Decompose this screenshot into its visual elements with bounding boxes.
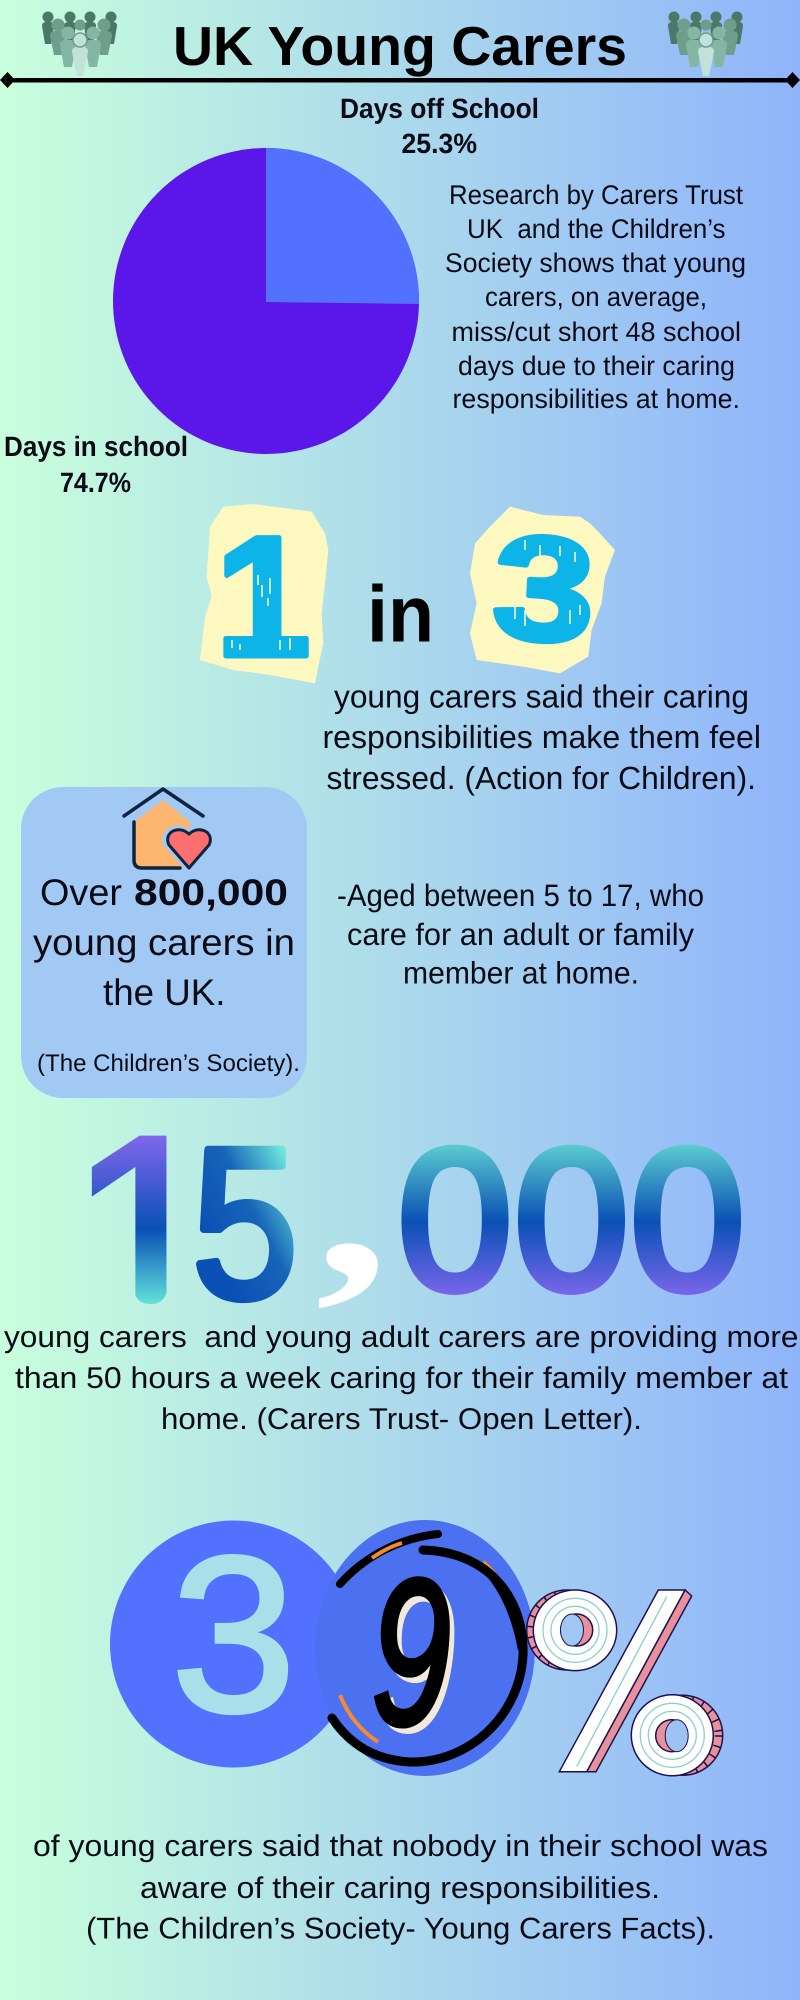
icon: group of people right (668, 12, 743, 76)
text block: aged between: -Aged between 5 to 17, who (337, 878, 704, 913)
text: over 800,000: the UK. (103, 972, 226, 1013)
text: in: in (367, 570, 434, 658)
text block: nobody aware: of young carers said that nobody in their school was (33, 1830, 768, 1863)
text block: 50 hours: young carers and young adult carers are providing more (4, 1321, 798, 1354)
top ring of percent (527, 1590, 617, 1671)
label: days off school (340, 93, 539, 159)
title divider with diamonds (0, 72, 800, 88)
label: days in school: 74.7% (60, 467, 131, 498)
slash of percent: % (528, 1543, 726, 1828)
text block: aged between (337, 878, 704, 990)
text block: nobody aware: (The Children’s Society- Young Carers Facts). (86, 1912, 715, 1946)
text block: 50 hours: than 50 hours a week caring for their family member at (15, 1362, 789, 1395)
text: over 800,000 (33, 872, 295, 1013)
text: over 800,000: Over (40, 872, 122, 913)
big number: 15,000: 1 (68, 1080, 224, 1380)
text block: stressed (322, 678, 761, 796)
big number: 15,000: , (315, 1083, 389, 1322)
pie chart (113, 148, 419, 454)
circle behind 3 (110, 1520, 357, 1768)
text block: aged between: member at home. (403, 956, 639, 990)
icon: house with heart (124, 789, 216, 874)
digit 3: 3 (171, 1511, 296, 1759)
text block: nobody aware: aware of their caring responsibilities. (140, 1872, 660, 1905)
label: days in school: Days in school (4, 431, 188, 462)
text block: stressed: responsibilities make them feel (322, 719, 761, 755)
big number: 15,000: 5 (192, 1104, 298, 1343)
big number: 15,000: 0 (630, 1107, 745, 1332)
text block: research: carers, on average, (485, 282, 707, 312)
digit 9 with ring: 9 (376, 1543, 456, 1775)
bottom ring of percent (631, 1695, 723, 1776)
label: days off school: Days off School (340, 93, 539, 124)
percent sign (526, 1588, 724, 1776)
digit 9 with ring (332, 1534, 524, 1775)
icon: group of people left (42, 12, 117, 76)
label: days off school: 25.3% (402, 128, 477, 159)
big number: 15,000: 0 (398, 1107, 512, 1332)
big number: 15,000 (92, 1136, 741, 1308)
big number: 39% (110, 1520, 724, 1776)
text block: research: responsibilities at home. (452, 384, 740, 414)
text block: research (445, 180, 746, 414)
text block: research: miss/cut short 48 school (452, 317, 741, 347)
big number: 15,000: 0 (514, 1107, 629, 1332)
big number: 3 on torn paper: 3 (489, 504, 599, 675)
text: source: (The Children’s Society). (37, 1050, 300, 1077)
text block: stressed: stressed. (Action for Children). (326, 760, 756, 796)
text: over 800,000: young carers in (33, 922, 295, 963)
text: over 800,000: 800,000 (134, 872, 288, 913)
big number: 1 on torn paper: 1 (215, 501, 311, 693)
title: UK Young Carers (173, 15, 627, 77)
panel: 800,000 carers (21, 787, 307, 1098)
text block: nobody aware (33, 1830, 768, 1946)
slash of percent (558, 1588, 693, 1772)
text block: 50 hours: home. (Carers Trust- Open Letter). (161, 1403, 642, 1436)
digit 9 with ring: 9 (371, 1537, 451, 1769)
text block: aged between: care for an adult or family (347, 917, 694, 952)
blob behind 9 (315, 1520, 535, 1776)
text block: research: days due to their caring (458, 351, 735, 381)
label: days in school (4, 431, 188, 498)
text block: stressed: young carers said their caring (334, 678, 749, 714)
text block: research: UK and the Children’s (467, 214, 726, 244)
big number: 3 on torn paper (470, 504, 615, 675)
text block: research: Society shows that young (445, 248, 746, 278)
text block: 50 hours (4, 1321, 798, 1436)
text block: research: Research by Carers Trust (449, 180, 743, 210)
